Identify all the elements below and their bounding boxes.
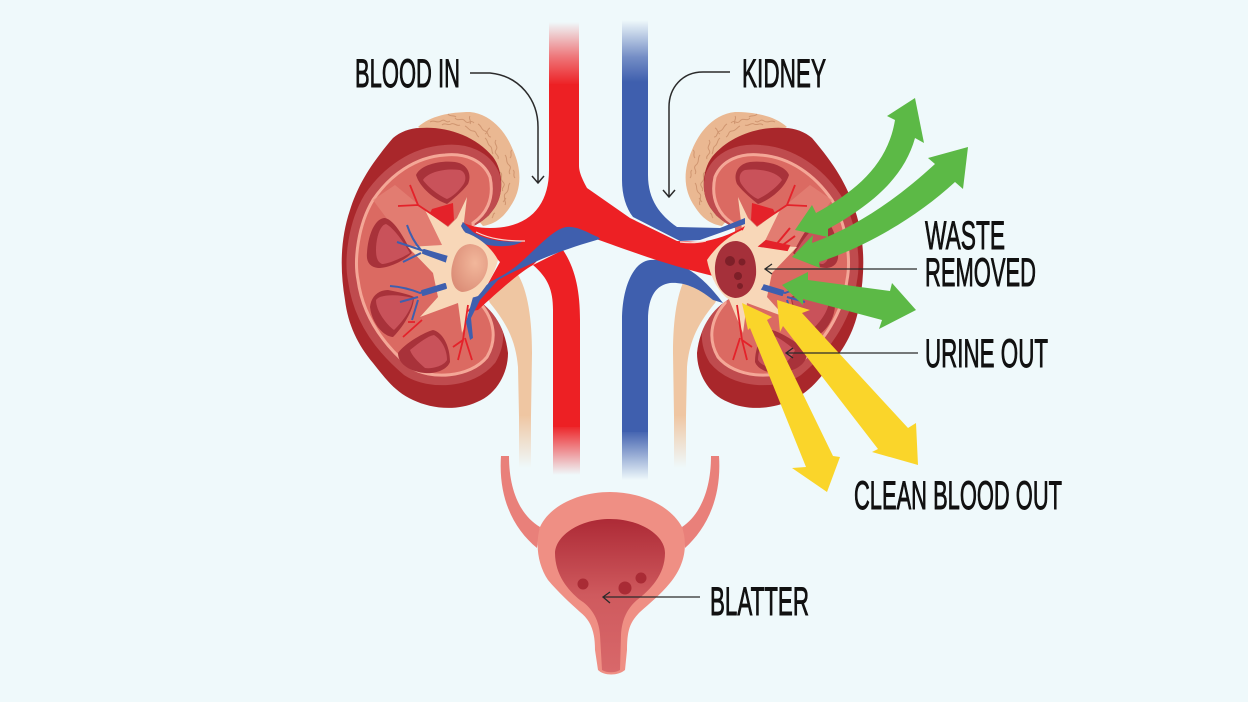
label: blatter: BLATTER — [710, 580, 809, 624]
arrow: yellow 2 — [777, 300, 918, 465]
bladder body — [538, 492, 685, 674]
leader: waste removed — [765, 264, 917, 274]
ureter right fade — [674, 415, 686, 468]
right kidney red branches — [760, 228, 795, 250]
kidney: left — [342, 112, 519, 408]
bladder cavity — [555, 519, 665, 672]
label: kidney: KIDNEY — [742, 52, 826, 96]
ureter: right — [673, 273, 718, 468]
kidney: right — [686, 112, 863, 408]
medulla body — [715, 241, 756, 298]
arrow: green up 1 — [795, 98, 924, 237]
left kidney pelvis — [451, 244, 488, 292]
blue vein: lower — [622, 260, 723, 432]
ureter: left — [487, 273, 532, 468]
bladder — [501, 456, 719, 674]
ureter left solid part — [487, 273, 532, 416]
right kidney medulla — [715, 241, 756, 298]
leader: bladder — [603, 592, 700, 603]
red artery: top fade — [549, 22, 579, 85]
arrow: green horizontal — [782, 272, 916, 329]
leader: urine out — [786, 348, 918, 358]
blue vein: left crossing — [466, 227, 600, 340]
blue vein: left hilum branch — [461, 222, 523, 246]
red artery: lower — [533, 250, 580, 427]
red artery: lower fade — [553, 425, 580, 475]
blue vein: lower fade — [622, 430, 648, 480]
arrow: green up 2 — [792, 147, 968, 268]
leader: blood in — [470, 73, 544, 183]
label: waste: WASTE — [925, 214, 1005, 258]
blue vein: top and right branch — [622, 82, 745, 241]
blue vein: top fade — [622, 20, 648, 82]
red artery: trunk and branches — [462, 84, 745, 312]
ureter left fade — [519, 415, 531, 468]
label: blood in: BLOOD IN — [355, 52, 460, 96]
label: urine out: URINE OUT — [925, 332, 1048, 376]
bladder ureters — [501, 456, 719, 548]
bladder dots — [578, 572, 646, 594]
hilum highlight — [476, 232, 706, 243]
medulla dots — [725, 256, 746, 289]
kidney: left upper blue branch — [397, 225, 448, 262]
label: clean blood out: CLEAN BLOOD OUT — [854, 474, 1062, 518]
leader: kidney — [663, 72, 730, 197]
ureter right solid part — [673, 273, 718, 416]
right kidney sinus — [707, 230, 766, 301]
label: removed: REMOVED — [925, 251, 1036, 295]
arrow: yellow 1 — [742, 303, 840, 492]
left kidney sinus — [445, 232, 498, 298]
